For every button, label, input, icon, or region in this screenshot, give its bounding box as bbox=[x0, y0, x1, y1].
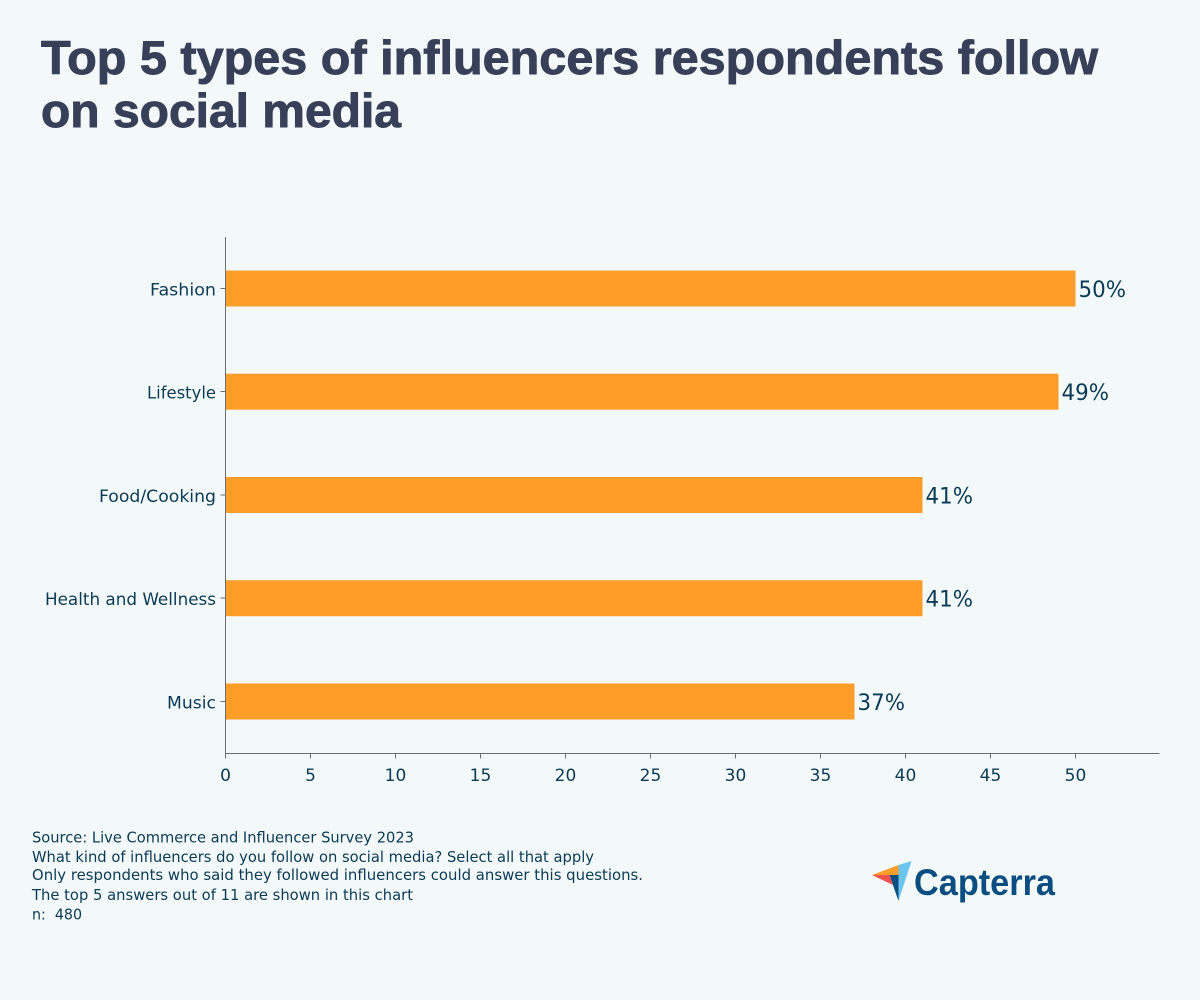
title: on social media bbox=[41, 84, 402, 137]
value labels: 41% bbox=[926, 588, 973, 612]
source notes bbox=[31, 828, 643, 924]
category labels bbox=[45, 280, 216, 714]
source notes: n: 480 bbox=[32, 906, 82, 924]
source notes: Source: Live Commerce and Influencer Survey 2023 bbox=[32, 828, 414, 846]
title: Top 5 types of influencers respondents follow bbox=[41, 31, 1098, 84]
x axis tick labels: 15 bbox=[470, 766, 491, 786]
value labels: 37% bbox=[858, 691, 905, 716]
source notes: What kind of influencers do you follow on social media? Select all that apply bbox=[32, 848, 594, 866]
bar chart bbox=[45, 237, 1160, 786]
x axis tick labels: 5 bbox=[305, 766, 316, 786]
category labels: Music bbox=[167, 694, 216, 714]
source notes: The top 5 answers out of 11 are shown in this chart bbox=[31, 886, 413, 904]
logo: Capterra bbox=[872, 861, 1055, 903]
category labels: Lifestyle bbox=[147, 384, 216, 404]
x axis tick labels: 25 bbox=[640, 766, 661, 786]
value labels: 50% bbox=[1078, 278, 1126, 303]
category labels: Fashion bbox=[150, 280, 216, 300]
category labels: Health and Wellness bbox=[45, 590, 216, 610]
x axis tick labels: 40 bbox=[895, 766, 916, 786]
x axis tick labels: 35 bbox=[810, 766, 831, 786]
bars bbox=[226, 270, 1076, 720]
x axis tick labels: 30 bbox=[725, 766, 746, 786]
value labels bbox=[858, 278, 1126, 716]
x axis tick labels bbox=[220, 766, 1086, 786]
category labels: Food/Cooking bbox=[99, 487, 216, 507]
value labels: 41% bbox=[926, 484, 973, 510]
x axis tick labels: 10 bbox=[385, 766, 406, 786]
title bbox=[41, 31, 1098, 137]
axes bbox=[220, 237, 1160, 758]
x axis tick labels: 0 bbox=[220, 766, 231, 786]
x axis tick labels: 50 bbox=[1065, 766, 1086, 786]
icon: Capterra arrow bbox=[872, 861, 912, 901]
x axis tick labels: 20 bbox=[555, 766, 576, 786]
logo wordmark: Capterra bbox=[914, 862, 1055, 903]
source notes: Only respondents who said they followed influencers could answer this questions. bbox=[32, 866, 643, 884]
value labels: 49% bbox=[1062, 381, 1109, 406]
x axis tick labels: 45 bbox=[980, 766, 1001, 786]
